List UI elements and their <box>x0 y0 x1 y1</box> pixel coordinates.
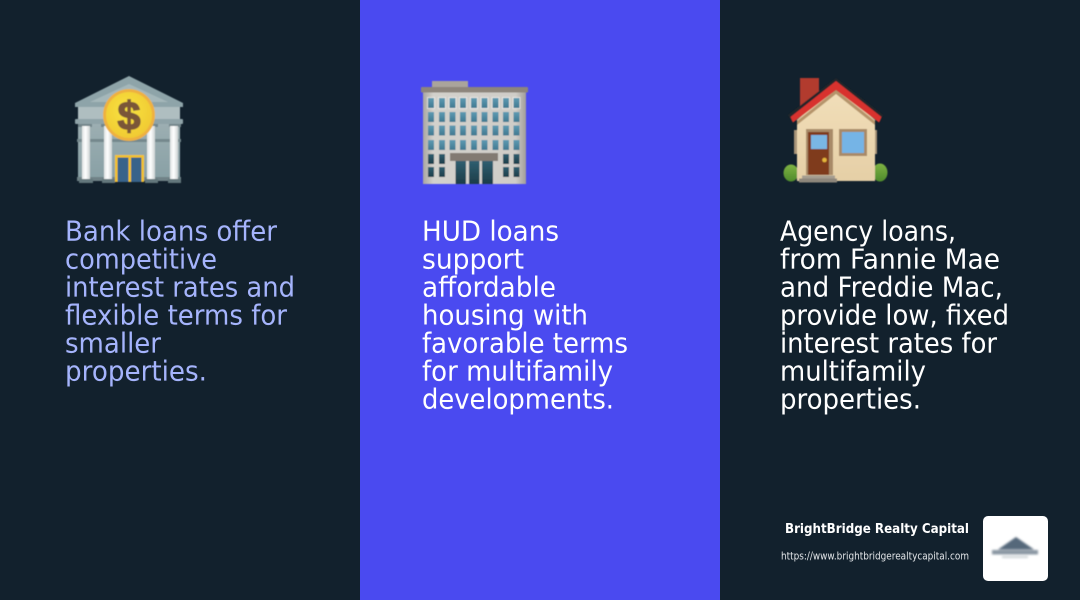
icon: office building <box>421 81 528 184</box>
logo card <box>983 516 1048 581</box>
text: HUD loans description: HUD loans <box>422 216 559 248</box>
text: agency loans description: interest rates for <box>780 328 998 360</box>
text: agency loans description: multifamily <box>780 356 926 388</box>
website url: https://www.brightbridgerealtycapital.com <box>781 552 969 562</box>
text: HUD loans description: favorable terms <box>422 328 628 360</box>
text: agency loans description: and Freddie Mac, <box>780 272 1003 304</box>
text: HUD loans description: housing with <box>422 300 588 332</box>
text: bank loans description: interest rates and <box>65 272 295 304</box>
text: HUD loans description: for multifamily <box>422 356 613 388</box>
text: agency loans description: provide low, fixed <box>780 300 1009 332</box>
text: bank loans description: smaller <box>65 328 162 360</box>
text: HUD loans description <box>422 216 628 416</box>
text: agency loans description: from Fannie Mae <box>780 244 1000 276</box>
text: bank loans description: flexible terms for <box>65 300 288 332</box>
panel: HUD loans <box>360 0 720 600</box>
panel: agency loans <box>720 0 1080 600</box>
brand name: BrightBridge Realty Capital <box>785 522 969 537</box>
text: bank loans description <box>65 216 295 388</box>
text: HUD loans description: support <box>422 244 524 276</box>
text: bank loans description: properties. <box>65 356 207 388</box>
panel: bank loans <box>0 0 360 600</box>
icon: bank with dollar coin: $ <box>118 94 140 138</box>
text: agency loans description: Agency loans, <box>780 216 956 248</box>
text: agency loans description: properties. <box>780 384 921 416</box>
icon: bank with dollar coin <box>75 76 183 183</box>
text: agency loans description <box>780 216 1009 416</box>
text: HUD loans description: developments. <box>422 384 614 416</box>
text: HUD loans description: affordable <box>422 272 556 304</box>
text: bank loans description: competitive <box>65 244 217 276</box>
icon: house <box>784 78 888 182</box>
text: bank loans description: Bank loans offer <box>65 216 278 248</box>
